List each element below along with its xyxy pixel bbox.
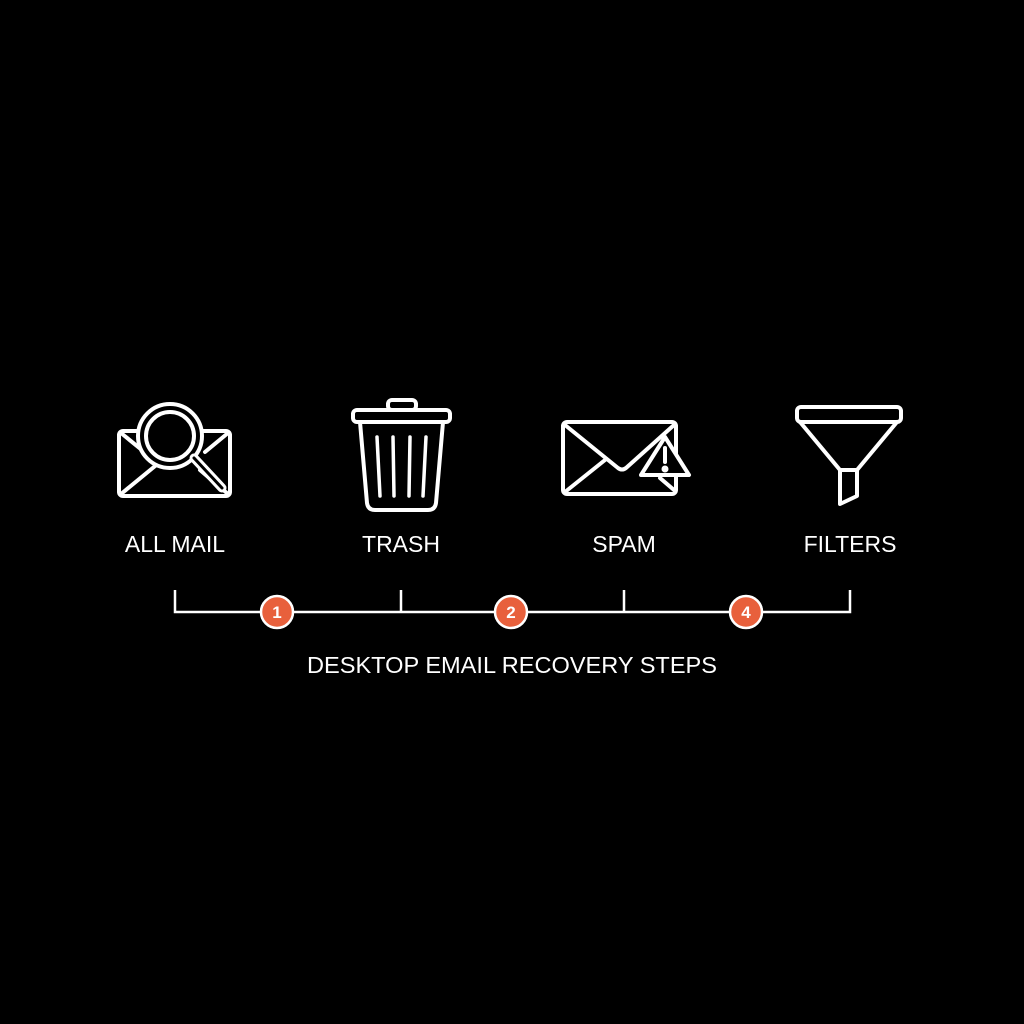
- label: all mail: ALL MAIL: [125, 531, 225, 557]
- step 4: 4: [741, 603, 751, 622]
- icon: envelope with magnifier: [119, 404, 230, 496]
- icon: spam envelope with warning: [563, 422, 689, 494]
- label: filters: FILTERS: [804, 531, 896, 557]
- timeline: [175, 590, 850, 612]
- step markers: [261, 596, 762, 628]
- icon: funnel: [797, 407, 901, 504]
- caption: DESKTOP EMAIL RECOVERY STEPS: [307, 652, 717, 678]
- label: trash: TRASH: [362, 531, 440, 557]
- step 1: [261, 596, 293, 628]
- step 1: 1: [272, 603, 282, 622]
- label: spam: SPAM: [592, 531, 656, 557]
- step 4: [730, 596, 762, 628]
- step 2: [495, 596, 527, 628]
- icon: trash can: [353, 400, 450, 510]
- labels: [125, 531, 896, 557]
- step 2: 2: [506, 603, 516, 622]
